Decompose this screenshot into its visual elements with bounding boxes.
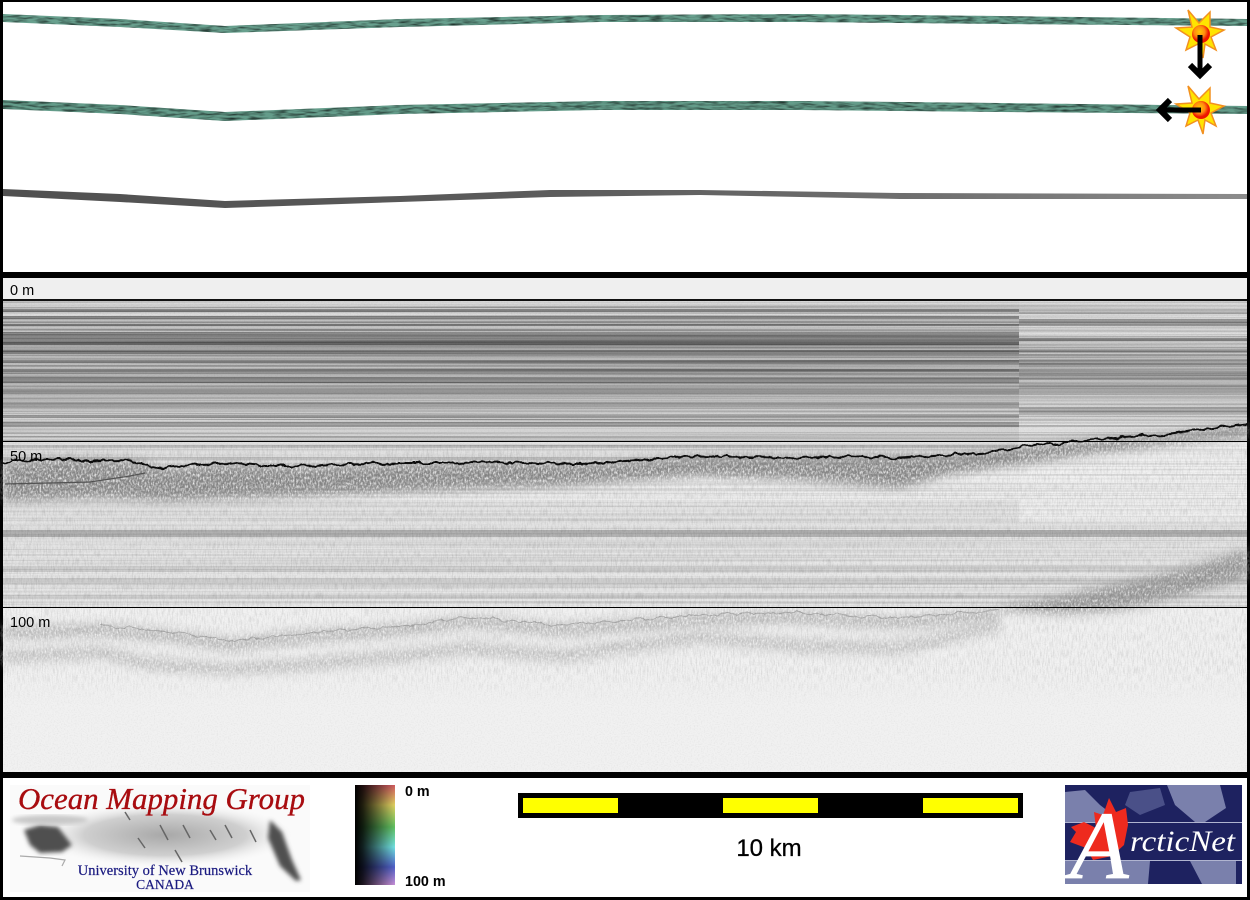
scale bar — [518, 793, 1023, 862]
water column band, left section — [3, 301, 1019, 441]
sediment layer below seabed — [3, 424, 1247, 501]
depth label 50 m: 50 m — [10, 449, 42, 465]
depth colour legend — [355, 784, 446, 890]
logo: ArcticNet — [1064, 785, 1242, 899]
arrow: left — [1160, 100, 1201, 120]
seabed multiple top edge — [100, 610, 1000, 641]
sub-bottom reflector — [5, 473, 145, 484]
depth label 0 m: 0 m — [10, 283, 34, 299]
arrow: down — [1190, 35, 1210, 75]
wordmark: rcticNet — [1130, 825, 1236, 858]
fine horizontal stripe texture — [3, 301, 1247, 441]
logo subtitle: University of New Brunswick — [78, 863, 253, 879]
sub-seabed banding — [3, 441, 1247, 772]
letter A: A — [1064, 792, 1129, 899]
logo title: Ocean Mapping Group — [18, 781, 305, 816]
track line: middle teal swath — [3, 100, 1247, 121]
fade below multiple — [3, 670, 1247, 706]
depth grid line 100 m — [3, 607, 1247, 608]
icon: upper star marker — [1176, 10, 1224, 58]
seabed reflector — [3, 424, 1247, 468]
scale label: 10 km — [736, 835, 802, 862]
icon: lower star marker — [1176, 86, 1224, 134]
speckle noise — [3, 301, 1247, 772]
vertical speckle texture — [3, 445, 1247, 705]
surface line — [3, 299, 1247, 301]
seabed multiple echo, upper band — [3, 614, 1000, 645]
legend label bottom: 100 m — [405, 874, 446, 890]
logo: Ocean Mapping Group — [10, 781, 310, 892]
seabed multiple echo, lower band — [3, 625, 1000, 670]
lower clean water — [3, 706, 1247, 772]
panel: track map — [3, 2, 1247, 272]
legend label top: 0 m — [405, 784, 430, 800]
lower water column rise, right — [1000, 549, 1247, 614]
track line: upper teal swath — [3, 14, 1247, 33]
track line: lower grey swath — [3, 189, 1247, 208]
panel: sonar profile — [3, 278, 1247, 772]
depth label 100 m: 100 m — [10, 615, 50, 631]
maple leaf — [1070, 798, 1128, 860]
horizontal stripe texture below seabed — [3, 441, 1247, 607]
depth grid line 50 m — [3, 441, 1247, 442]
water column band, right section — [1019, 301, 1247, 441]
logo country: CANADA — [136, 877, 194, 892]
panel: legend footer — [3, 778, 1247, 899]
